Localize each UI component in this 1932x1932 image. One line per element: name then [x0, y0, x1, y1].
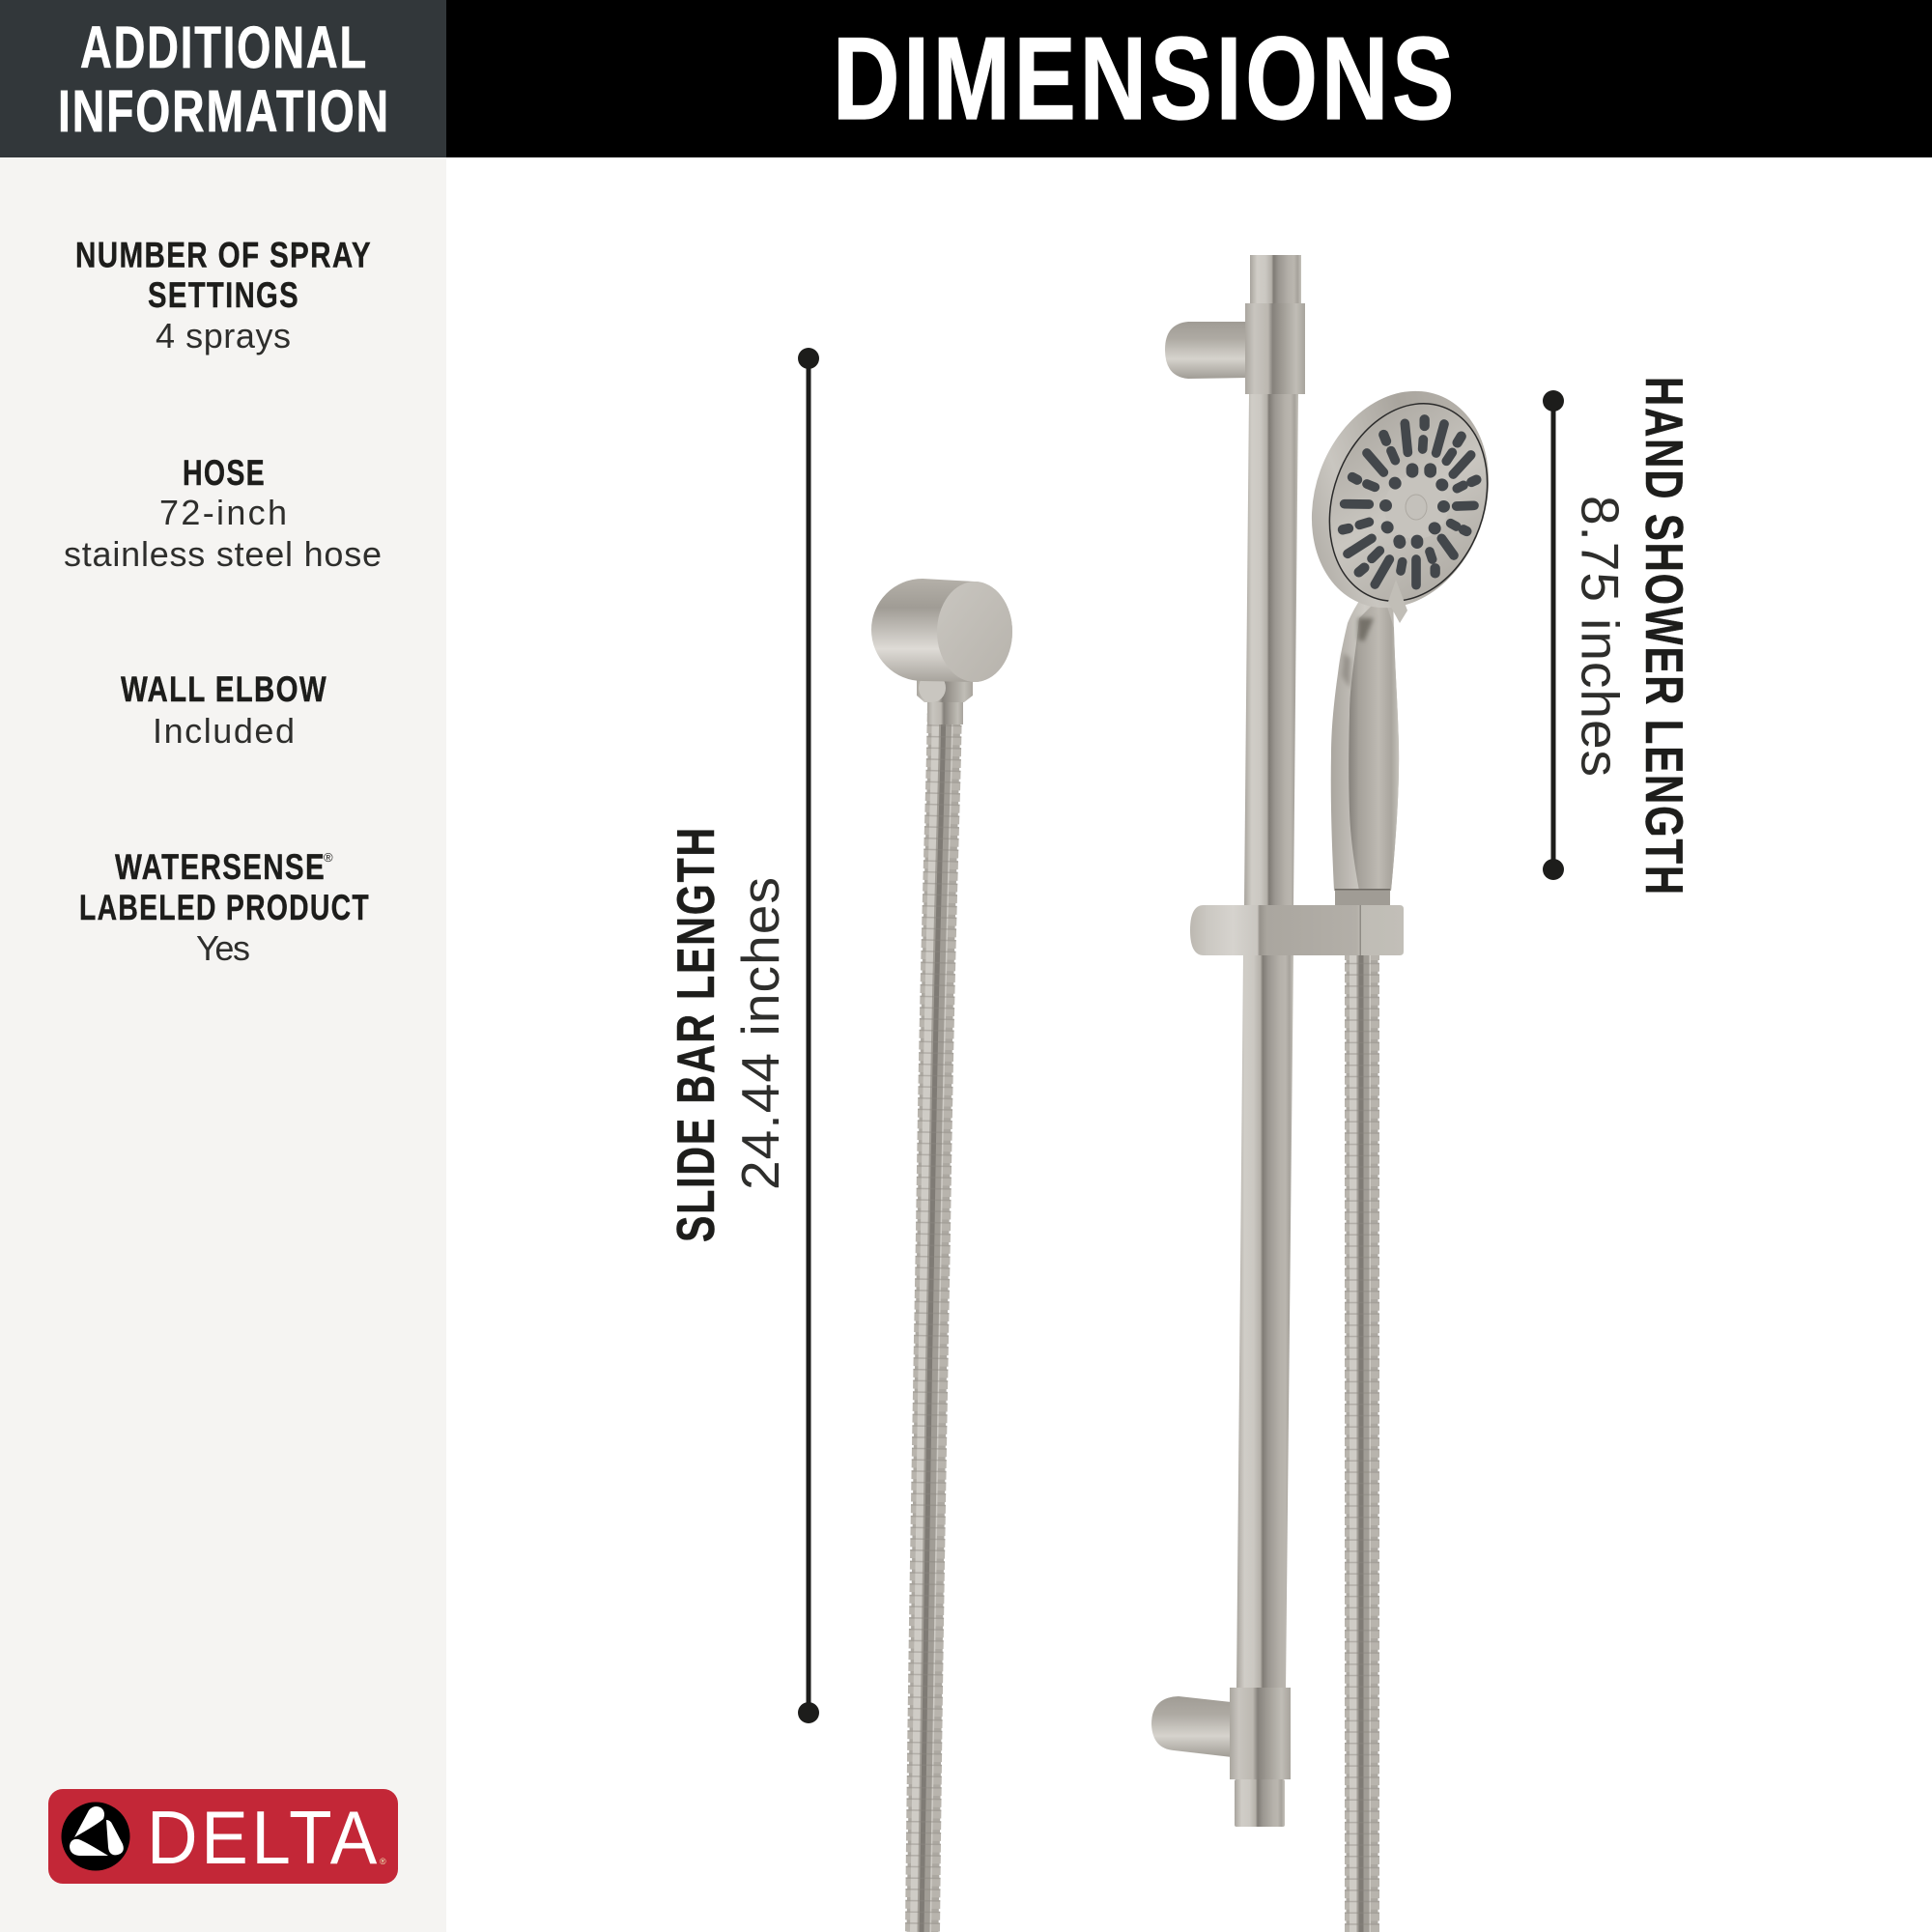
label: slide bar length [666, 826, 790, 1242]
text block: watersense labeled product [79, 847, 370, 968]
title bar: dimensions: DIMENSIONS [833, 13, 1458, 144]
panel: sidebar background [0, 157, 446, 1932]
product: hand shower [1282, 366, 1519, 906]
dimension line: hand shower [1543, 390, 1564, 880]
heading: additional information [0, 0, 446, 157]
text block: number of spray settings: SETTINGS [148, 275, 299, 315]
text block: wall elbow [121, 669, 327, 751]
text block: number of spray settings: NUMBER OF SPRAY [75, 236, 372, 274]
dimension line: slide bar [798, 348, 819, 1723]
text block: hose: HOSE [183, 453, 266, 493]
text block: number of spray settings: 4 sprays [156, 316, 291, 355]
heading: additional information: ADDITIONAL [80, 14, 368, 80]
label: hand shower length: 8.75 inches [1571, 496, 1631, 777]
text block: number of spray settings [75, 236, 372, 355]
text block: watersense labeled product: LABELED PRODUCT [79, 888, 370, 927]
product: slide bar [1151, 255, 1305, 1827]
icon: spray nozzles [1343, 419, 1476, 585]
text block: watersense labeled product: ® [324, 850, 333, 865]
heading: additional information: INFORMATION [58, 78, 390, 144]
logo: delta [48, 1789, 398, 1884]
text block: wall elbow: Included [153, 711, 295, 751]
text block: hose: stainless steel hose [64, 534, 382, 574]
label: hand shower length: HAND SHOWER LENGTH [1634, 377, 1694, 896]
text block: wall elbow: WALL ELBOW [121, 669, 327, 709]
product: right hose [1360, 952, 1363, 1932]
label: slide bar length: SLIDE BAR LENGTH [666, 826, 725, 1242]
logo: delta: DELTA [147, 1795, 381, 1880]
title bar: dimensions [446, 0, 1932, 157]
logo: delta: ® [380, 1857, 386, 1866]
product: wall elbow and hose [871, 579, 1012, 1932]
label: slide bar length: 24.44 inches [730, 877, 790, 1190]
text block: watersense labeled product: Yes [196, 928, 250, 968]
product: sliding bracket [1190, 905, 1404, 955]
text block: hose: 72-inch [159, 493, 287, 532]
text block: watersense labeled product: WATERSENSE [115, 847, 326, 887]
text block: hose [64, 453, 382, 574]
label: hand shower length [1571, 377, 1694, 896]
